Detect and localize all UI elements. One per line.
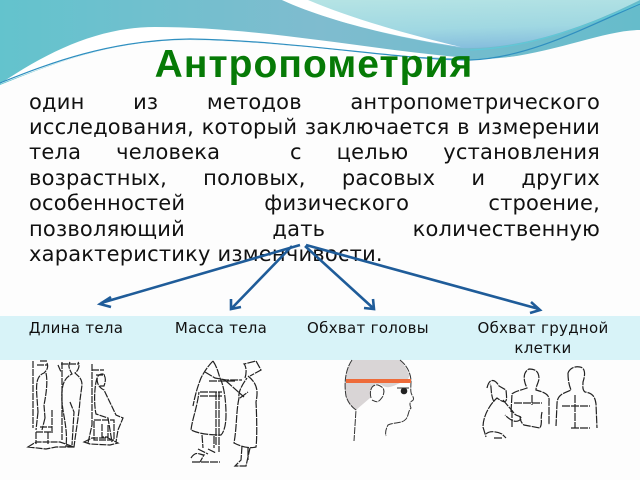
illustration: measuring body mass [191, 361, 261, 466]
header wave decoration [0, 0, 640, 85]
definition text block [29, 90, 600, 266]
definition text block: возрастных, половых, расовых и других [29, 166, 600, 190]
label band [0, 316, 640, 360]
definition text block: тела человека с целью установления [29, 140, 600, 164]
definition text block: позволяющий дать количественную [29, 217, 600, 241]
definition text block: особенностей физического строение, [29, 191, 600, 215]
label: body mass: Масса тела [175, 319, 267, 337]
arrow to head circumference [305, 246, 374, 309]
arrow to body mass [231, 246, 292, 309]
label: chest circumference: Обхват грудной клетки [477, 319, 609, 357]
illustration: measuring body length [28, 361, 123, 449]
definition text block: исследования, который заключается в измерении [29, 115, 600, 139]
definition text block: один из методов антропометрического [29, 90, 600, 114]
label: head circumference: Обхват головы [307, 319, 429, 337]
title: Антропометрия [155, 43, 473, 86]
arrow to chest circumference [306, 245, 540, 313]
label: body length: Длина тела [29, 319, 123, 337]
arrow to body length [100, 245, 300, 307]
illustration: measuring chest circumference [483, 367, 597, 438]
illustration: measuring head circumference [345, 360, 414, 441]
definition text block: характеристику изменчивости. [29, 242, 383, 266]
